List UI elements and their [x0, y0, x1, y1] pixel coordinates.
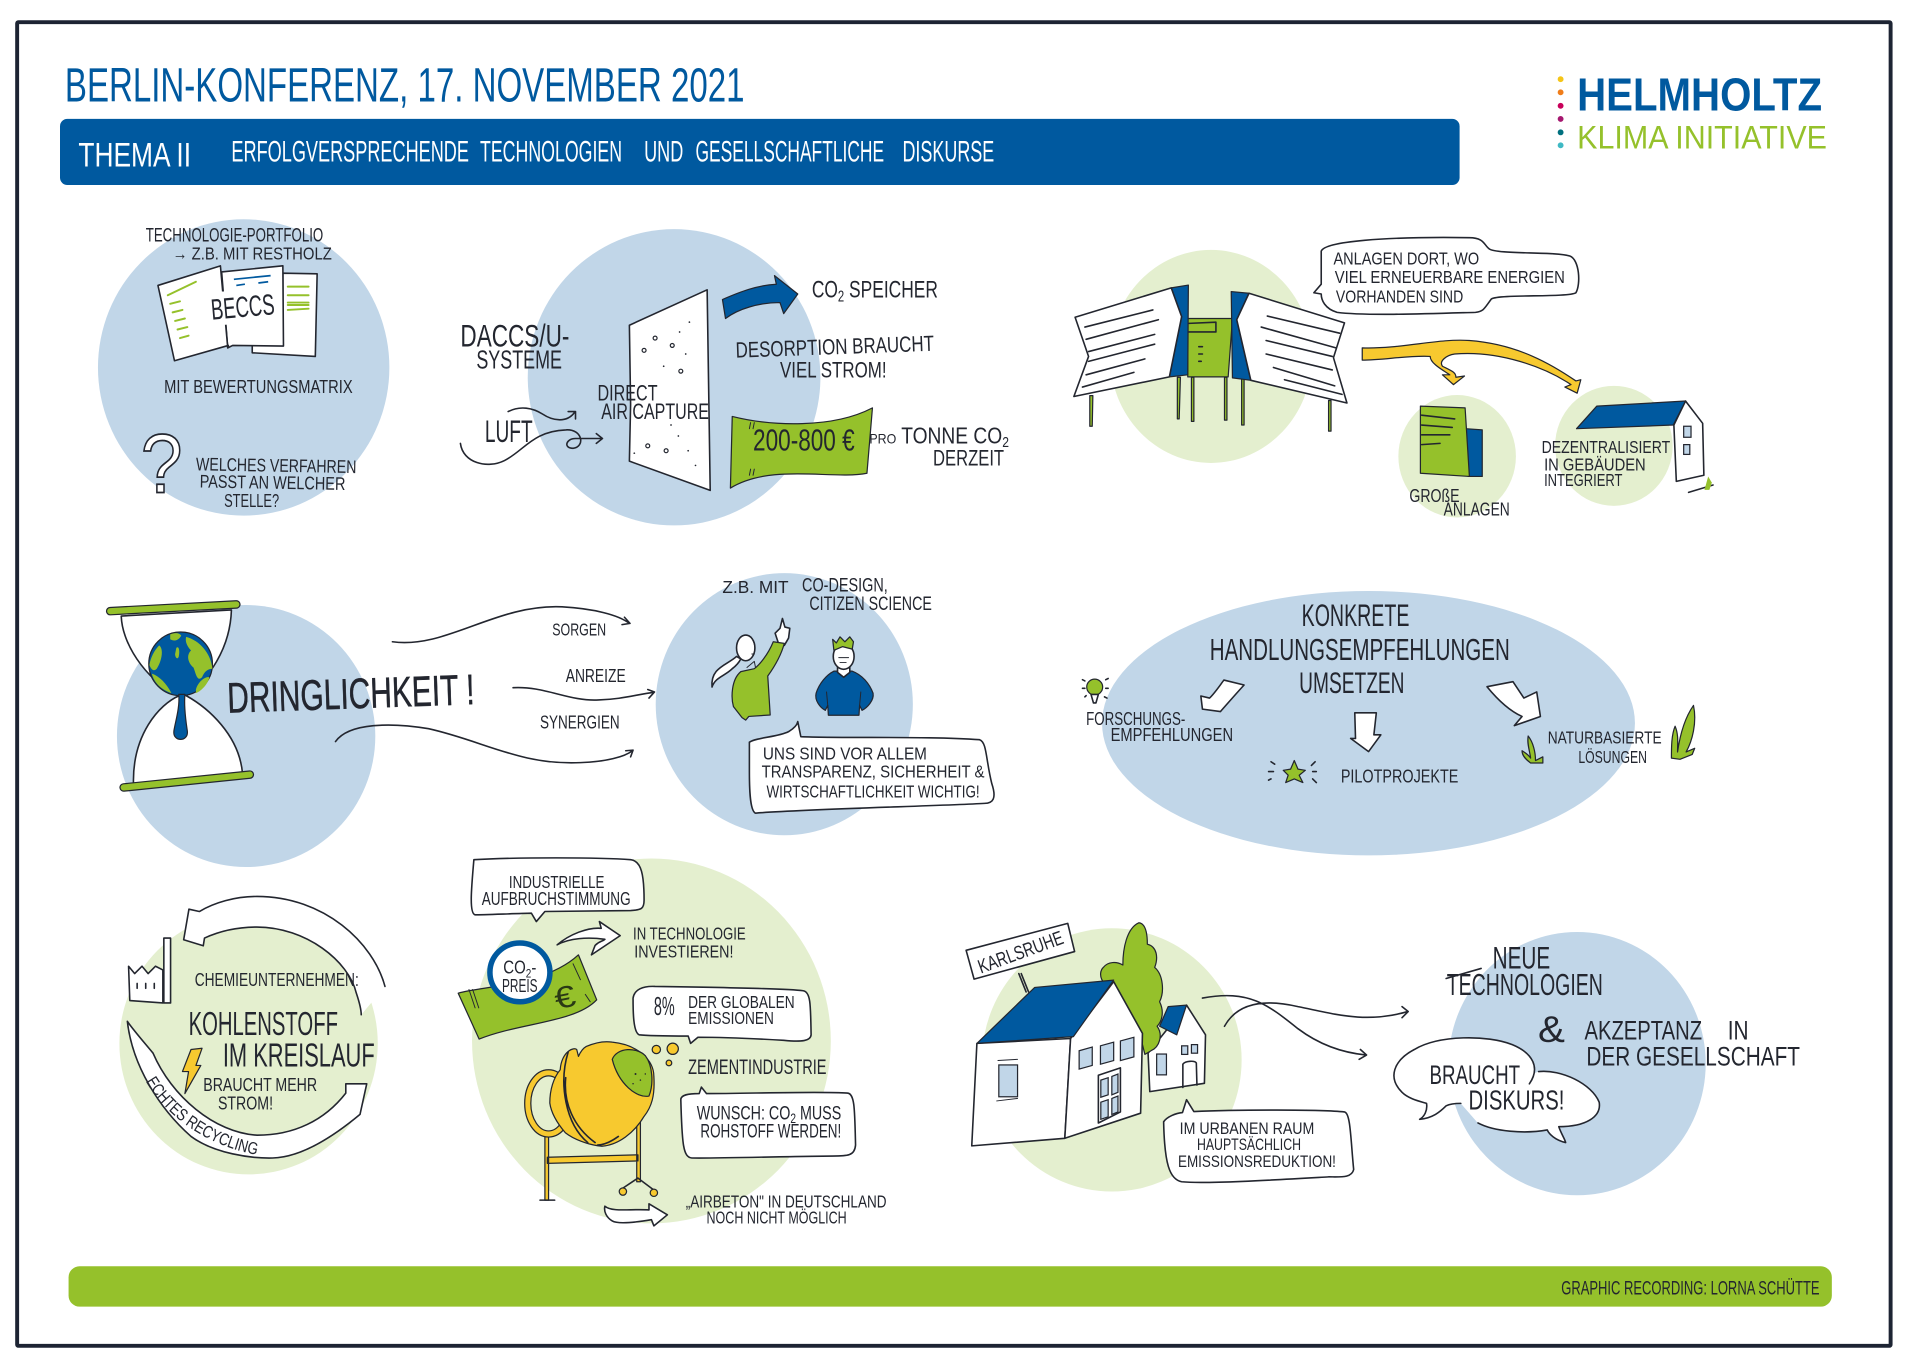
panel: direct air capture: DIRECT [598, 381, 658, 406]
icon: small house [1148, 1005, 1206, 1092]
icon: solar panel installation [1074, 285, 1347, 431]
panel: concrete recommendations: PILOTPROJEKTE [1341, 766, 1458, 787]
banner heading [231, 136, 994, 169]
panel: solar and wind installations: IN GEBÄUDEN [1544, 454, 1646, 474]
callout: needs discourse: BRAUCHT [1429, 1060, 1520, 1090]
icon: banknote with CO2 price [458, 943, 597, 1039]
callout: transparency, safety, economy: TRANSPARENZ, SICHERHEIT & [762, 762, 985, 782]
panel: direct air capture: DESORPTION BRAUCHT [735, 331, 934, 363]
panel: new technologies and discourse: IN [1728, 1016, 1749, 1046]
callout: urban emission reduction: HAUPTSÄCHLICH [1197, 1135, 1301, 1154]
panel: new technologies and discourse: DER GESELLSCHAFT [1586, 1041, 1800, 1071]
panel: carbon in the cycle: STROM! [218, 1093, 273, 1114]
callout: renewable energies: VIEL ERNEUERBARE ENERGIEN [1335, 267, 1565, 287]
icon: BECCS documents [158, 266, 317, 361]
heading: recommendations: HANDLUNGSEMPFEHLUNGEN [1210, 633, 1510, 667]
banner label: Thema II: THEMA II [78, 137, 191, 175]
icon: Karlsruhe sign [966, 923, 1075, 992]
panel: solar and wind installations [1074, 237, 1713, 520]
panel: BECCS technology portfolio: STELLE? [224, 490, 279, 511]
panel: co-design and citizen science: CITIZEN SCIENCE [809, 593, 932, 615]
icon: BECCS documents: BECCS [210, 288, 276, 327]
callout: transparency, safety, economy: UNS SIND VOR ALLEM [763, 743, 927, 763]
panel: Karlsruhe urban [966, 923, 1354, 1192]
icon: hourglass with earth [110, 604, 250, 787]
panel: concrete recommendations: NATURBASIERTE [1548, 727, 1662, 747]
icon: house with solar roof [1577, 401, 1713, 492]
heading: new technologies: TECHNOLOGIEN [1447, 968, 1603, 1002]
theme banner [60, 119, 1460, 185]
panel: solar and wind installations: GROßE [1409, 485, 1460, 506]
callout: urban emission reduction [1164, 1100, 1354, 1182]
callout: 8 percent: 8% [654, 993, 675, 1021]
heading: urgency: DRINGLICHKEIT ! [226, 666, 475, 723]
panel: concrete recommendations: FORSCHUNGS- [1086, 708, 1185, 729]
panel: carbon in the cycle: KOHLENSTOFF [189, 1006, 338, 1043]
panel: BECCS technology portfolio: WELCHES VERFAHREN [196, 453, 357, 477]
banner heading: GESELLSCHAFTLICHE [696, 136, 884, 169]
callout: CO2 as raw material: WUNSCH: CO [697, 1103, 821, 1124]
panel: direct air capture [460, 229, 1009, 525]
arrow: top cycle arrow [184, 896, 385, 1015]
callout: industrial spirit [471, 858, 644, 922]
heading: recommendations [1210, 597, 1510, 700]
callout: urban emission reduction: EMISSIONSREDUKTION! [1178, 1152, 1336, 1171]
callout: CO2 as raw material: ROHSTOFF WERDEN! [700, 1122, 841, 1143]
panel: cement industry and CO2 price: „AIRBETON" IN DEUTSCHLAND [686, 1191, 887, 1211]
callout: industrial spirit: AUFBRUCHSTIMMUNG [482, 888, 631, 909]
panel: carbon in the cycle: BRAUCHT MEHR [203, 1074, 317, 1095]
panel: cement industry and CO2 price: INVESTIEREN! [634, 942, 733, 962]
panel: cement industry and CO2 price [458, 858, 887, 1227]
arrows: worries, incentives, synergies [336, 607, 654, 763]
panel: concrete recommendations [1082, 591, 1695, 855]
callout: renewable energies [1314, 237, 1579, 314]
panel: new technologies and discourse: AKZEPTANZ [1584, 1016, 1702, 1046]
callout: transparency, safety, economy: WIRTSCHAFTLICHKEIT WICHTIG! [767, 781, 980, 801]
icon: Karlsruhe sign: KARLSRUHE [975, 927, 1067, 978]
icon: large facility [1420, 406, 1482, 476]
panel: cement industry and CO2 price: NOCH NICHT MÖGLICH [707, 1207, 847, 1227]
icon: woman pointing up [712, 618, 790, 720]
arrow: to nature-based solutions [1487, 682, 1540, 726]
panel: BECCS technology portfolio: PASST AN WELCHER [200, 470, 346, 494]
panel: direct air capture: PRO [869, 431, 896, 446]
icon: thought bubbles [652, 1043, 678, 1066]
arrow: airbeton [605, 1204, 667, 1226]
panel: urgency hourglass [110, 604, 475, 867]
panel: direct air capture: SYSTEME [476, 347, 562, 375]
callout: CO2 as raw material: MUSS [796, 1103, 841, 1124]
panel: direct air capture: LUFT [485, 413, 533, 449]
heading: recommendations: KONKRETE [1302, 597, 1409, 633]
icon: tree [1101, 923, 1162, 1054]
label: CO2 storage: CO [812, 277, 849, 304]
heading: recommendations: UMSETZEN [1299, 667, 1404, 700]
icon: question mark: ? [141, 417, 182, 510]
callout: 8 percent: EMISSIONEN [688, 1008, 774, 1028]
panel: solar and wind installations: INTEGRIERT [1544, 470, 1623, 490]
banner heading: UND [644, 136, 683, 169]
panel: BECCS technology portfolio: TECHNOLOGIE-PORTFOLIO [146, 224, 323, 246]
icon: light bulb [1082, 678, 1108, 703]
callout: transparency, safety, economy [749, 722, 994, 813]
icon: green banknote with price [730, 408, 872, 488]
arrows: worries, incentives, synergies: SORGEN [552, 620, 606, 640]
icon: small grass [1522, 736, 1543, 763]
arrows: worries, incentives, synergies: SYNERGIEN [540, 712, 620, 733]
banner heading: TECHNOLOGIEN [480, 136, 622, 169]
panel: direct air capture: 2 [1002, 435, 1009, 451]
heading: new technologies: NEUE [1493, 940, 1550, 976]
callout: CO2 as raw material: 2 [790, 1111, 796, 1126]
icon: man with hands on hips [816, 637, 873, 715]
callout: industrial spirit: INDUSTRIELLE [509, 872, 604, 892]
arrow: bottom cycle arrow [127, 1021, 367, 1158]
panel: cement industry and CO2 price: ZEMENTINDUSTRIE [688, 1056, 827, 1079]
panel: concrete recommendations: EMPFEHLUNGEN [1111, 724, 1233, 745]
panel: BECCS technology portfolio: MIT BEWERTUNGSMATRIX [164, 376, 353, 397]
banner heading: DISKURSE [902, 136, 994, 169]
callout: renewable energies: VORHANDEN SIND [1336, 287, 1463, 307]
callout: renewable energies: ANLAGEN DORT, WO [1333, 249, 1479, 269]
icon: star [1269, 761, 1316, 783]
heading: new technologies [1446, 940, 1603, 1002]
arrows: worries, incentives, synergies: ANREIZE [566, 665, 626, 686]
title: BERLIN-KONFERENZ, 17. NOVEMBER 2021 [65, 60, 744, 113]
footer bar [69, 1266, 1832, 1307]
panel: solar and wind installations: DEZENTRALISIERT [1542, 437, 1671, 457]
curved label: true recycling: ECHTES RECYCLING [146, 1076, 258, 1154]
panel: carbon in the cycle [119, 896, 386, 1174]
label: CO2 storage: SPEICHER [844, 277, 938, 304]
icon: banknote with CO2 price: PREIS [502, 975, 538, 996]
icon: banknote with CO2 price: CO [503, 957, 531, 978]
panel: co-design and citizen science: CO-DESIGN, [802, 575, 888, 597]
panel: direct air capture: DACCS/U- [460, 318, 569, 354]
icon: green banknote with price: 200-800 € [753, 424, 855, 458]
label: CO2 storage: 2 [838, 288, 844, 305]
callout: needs discourse: DISKURS! [1469, 1085, 1564, 1116]
panel: new technologies and discourse [1394, 932, 1800, 1195]
logo: Helmholtz Klima Initiative [1558, 68, 1827, 155]
panel: co-design and citizen science [656, 573, 994, 835]
panel: large installations [1398, 395, 1516, 517]
arrow: yellow split arrow [1362, 340, 1581, 393]
icon: air capture filter panel [629, 290, 710, 490]
icon: banknote with CO2 price: - [531, 957, 536, 978]
arrow: CO2 to storage [722, 276, 798, 318]
panel: co-design and citizen science: Z.B. MIT [722, 577, 789, 597]
icon: main house [972, 980, 1142, 1146]
panel: carbon in the cycle: IM KREISLAUF [223, 1038, 375, 1075]
callout: needs discourse [1394, 1038, 1599, 1143]
banner heading: ERFOLGVERSPRECHENDE [231, 136, 469, 169]
panel: direct air capture: TONNE CO [901, 422, 1024, 448]
callout: CO2 as raw material [681, 1087, 856, 1158]
panel: BECCS technology portfolio: → Z.B. MIT RESTHOLZ [173, 244, 332, 264]
arrow: to research recommendations [1201, 680, 1244, 712]
icon: banknote with CO2 price: 2 [526, 966, 531, 980]
arrow: invest [557, 922, 620, 955]
icon: tall grass [1671, 705, 1695, 759]
arrows: to new technologies [1202, 996, 1408, 1059]
panel: direct air capture: VIEL STROM! [780, 357, 887, 382]
panel: direct air capture: DERZEIT [933, 445, 1004, 470]
callout: urban emission reduction: IM URBANEN RAUM [1180, 1119, 1314, 1138]
panel: cement industry and CO2 price: IN TECHNOLOGIE [633, 923, 746, 943]
panel: concrete recommendations: LÖSUNGEN [1578, 747, 1647, 767]
icon: lightning bolt [182, 1048, 202, 1094]
panel: BECCS technology portfolio [98, 219, 389, 516]
callout: 8 percent [633, 986, 811, 1043]
logo: Helmholtz Klima Initiative: HELMHOLTZ [1577, 68, 1822, 120]
logo: Helmholtz Klima Initiative: KLIMA INITIATIVE [1577, 119, 1827, 155]
panel: new technologies and discourse: & [1538, 1009, 1565, 1050]
panel: solar and wind installations: ANLAGEN [1444, 499, 1510, 520]
panel: decentralised installations [1555, 386, 1673, 506]
callout: 8 percent: DER GLOBALEN [688, 992, 795, 1012]
arrow: to pilot projects [1351, 713, 1381, 752]
panel: carbon in the cycle: CHEMIEUNTERNEHMEN: [195, 969, 359, 990]
icon: banknote with CO2 price: € [551, 979, 579, 1016]
panel: direct air capture: AIR CAPTURE [601, 399, 709, 424]
arrows: air flow [460, 408, 602, 464]
icon: factory [129, 938, 171, 1003]
icon: cement mixer [528, 1042, 658, 1200]
